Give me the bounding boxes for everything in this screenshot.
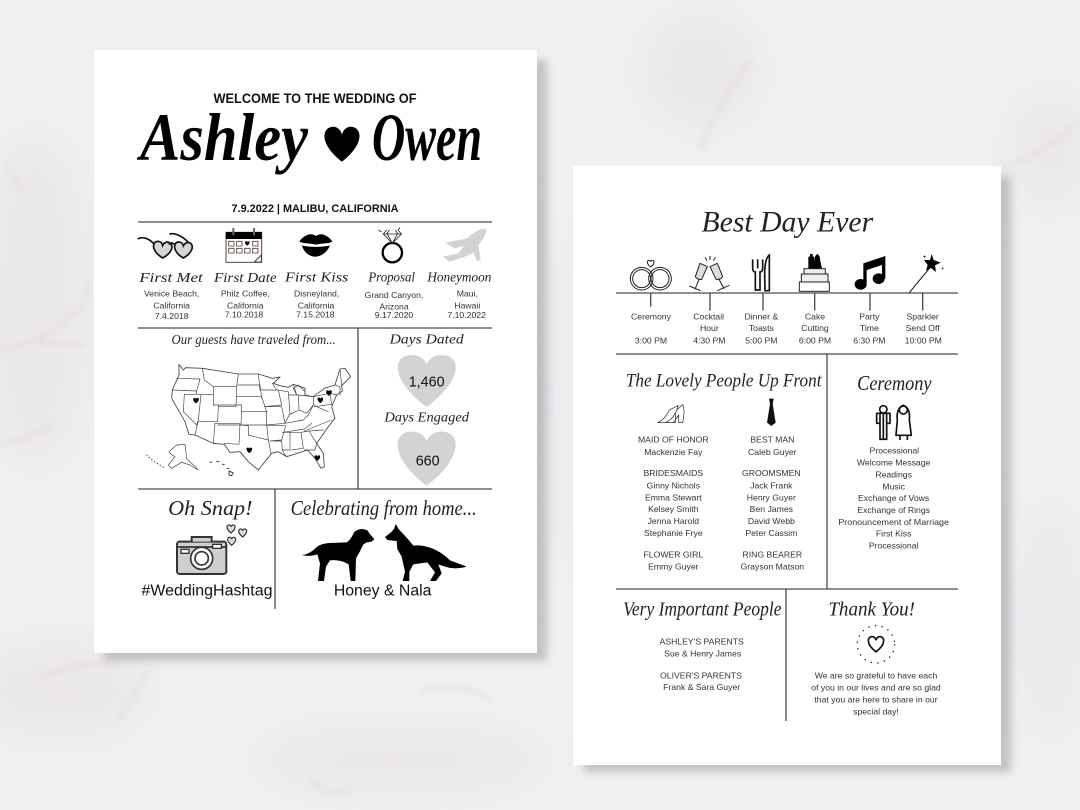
text: first date [213, 270, 277, 320]
text: first date: 7.10.2018 [225, 310, 263, 320]
text: groom party [741, 435, 804, 571]
text: party time: 6:30 PM [853, 335, 885, 345]
text: cocktail hour time [693, 311, 725, 345]
text: send off time [905, 311, 942, 345]
text: ceremony time: Ceremony [631, 311, 672, 321]
text: parents [660, 636, 744, 692]
heading: thank you: Thank You! [828, 599, 915, 621]
text: order of ceremony [838, 446, 949, 550]
text: order of ceremony: Processional [870, 446, 919, 456]
chart: US map [147, 364, 351, 476]
heading: guests traveled: Our guests have traveled from... [171, 333, 336, 348]
text: bridal party: Emmy Guyer [648, 561, 699, 571]
text: groom party: Jack Frank [750, 480, 793, 490]
text: honeymoon: Hawaii [454, 301, 480, 311]
text: order of ceremony: Exchange of Rings [857, 505, 931, 515]
title: couple names [136, 99, 482, 175]
text: ceremony time: 3:00 PM [635, 335, 667, 345]
icon: wedding rings [630, 260, 671, 290]
text: first met [138, 270, 203, 321]
map: Aleutian islands [147, 455, 165, 468]
text: first date: First Date [213, 270, 277, 285]
text: hashtag: #WeddingHashtag [141, 583, 272, 600]
panel: love story timeline [138, 227, 492, 321]
icon: radiant heart [857, 626, 895, 663]
text: honeymoon: Honeymoon [426, 269, 492, 284]
text: thank you message: We are so grateful to have each [815, 670, 937, 680]
text: order of ceremony: Exchange of Vows [858, 493, 930, 503]
text: dinner time: 5:00 PM [745, 335, 777, 345]
text: first met: First Met [138, 270, 203, 285]
icon: high heels [658, 405, 684, 423]
panel: day schedule [630, 207, 944, 345]
text: parents: Sue & Henry James [664, 649, 742, 659]
text: first kiss [284, 269, 348, 320]
icon: lips [299, 234, 332, 257]
text: thank you message: special day! [853, 706, 899, 716]
stat: days engaged: 660 [416, 454, 440, 470]
text: groom party: Peter Cassim [745, 528, 797, 538]
heading: lovely people: The Lovely People Up Front [626, 371, 822, 392]
text: first kiss: First Kiss [284, 269, 348, 284]
text: groom party: Grayson Matson [741, 561, 804, 571]
text: honeymoon [426, 269, 492, 320]
icon: necktie [767, 399, 776, 426]
text: party time: Party [859, 311, 880, 321]
stat: days engaged: Days Engaged [383, 411, 470, 426]
text: proposal [365, 269, 423, 320]
text: groom party: Caleb Guyer [748, 447, 797, 457]
text: groom party: David Webb [748, 516, 795, 526]
text: honeymoon: 7.10.2022 [447, 310, 486, 320]
text: order of ceremony: Processional [869, 540, 919, 550]
icon: heart sunglasses [138, 234, 192, 258]
text: send off time: Sparkler [907, 311, 939, 321]
panel: left card [94, 50, 537, 653]
text: dinner time: Dinner & [744, 311, 778, 321]
text: order of ceremony: Welcome Message [857, 458, 931, 468]
text: first kiss: California [298, 301, 334, 311]
text: cocktail hour time: 4:30 PM [693, 335, 725, 345]
stat: days engaged [383, 411, 470, 486]
text: groom party: BEST MAN [750, 435, 794, 445]
heading: oh snap: Oh Snap! [168, 498, 252, 520]
text: cake time: 6:00 PM [799, 335, 831, 345]
icon: bride and groom [877, 405, 911, 440]
text: send off time: Send Off [906, 323, 940, 333]
map: Hawaii [210, 462, 233, 476]
text: ceremony time [631, 311, 672, 345]
text: bridal party: Kelsey Smith [648, 504, 699, 514]
text: first date: Philz Coffee, [221, 289, 270, 299]
text: cake time: Cutting [801, 323, 829, 333]
text: honeymoon: Maui, [457, 289, 478, 299]
text: thank you message: that you are here to share in our [814, 694, 938, 704]
date and place: 7.9.2022 | MALIBU, CALIFORNIA [232, 203, 399, 215]
text: proposal: Arizona [379, 301, 409, 311]
text: thank you message [811, 670, 941, 716]
stat: days dated [389, 332, 465, 407]
text: cake time: Cake [805, 311, 825, 321]
text: groom party: GROOMSMEN [742, 468, 801, 478]
text: proposal: Proposal [367, 269, 415, 284]
text: dinner time: Toasts [749, 323, 775, 333]
text: first met: 7.4.2018 [155, 311, 189, 321]
text: first met: California [153, 301, 190, 311]
text: bridal party: MAID OF HONOR [638, 435, 709, 445]
text: thank you message: of you in our lives and are so glad [811, 683, 941, 693]
text: order of ceremony: Readings [875, 469, 913, 479]
text: pet names: Honey & Nala [334, 583, 432, 600]
text: first kiss: 7.15.2018 [296, 310, 335, 320]
text: bridal party [638, 435, 709, 571]
panel: lower left sections [141, 332, 477, 600]
text: bridal party: Ginny Nichols [647, 480, 701, 490]
text: first date: California [227, 301, 264, 311]
stat: days dated: Days Dated [389, 332, 465, 347]
title: couple names: Owen [372, 99, 482, 175]
text: bridal party: Stephanie Frye [644, 528, 703, 538]
map marker hearts [193, 390, 332, 461]
text: bridal party: BRIDESMAIDS [644, 468, 703, 478]
title: best day ever: Best Day Ever [701, 207, 874, 239]
text: groom party: Ben James [750, 504, 794, 514]
text: order of ceremony: First Kiss [876, 529, 912, 539]
panel: wedding party and ceremony [626, 371, 949, 571]
card shadows [104, 60, 1011, 772]
text: bridal party: FLOWER GIRL [644, 550, 703, 560]
icon: fork and knife [753, 255, 769, 291]
text: send off time: 10:00 PM [905, 335, 942, 345]
text: cocktail hour time: Hour [700, 323, 719, 333]
text: order of ceremony: Music [882, 481, 906, 491]
text: cocktail hour time: Cocktail [693, 311, 724, 321]
text: bridal party: Mackenzie Fay [644, 447, 703, 457]
title: welcome heading: WELCOME TO THE WEDDING OF [214, 91, 416, 106]
icon: diamond ring [378, 227, 402, 262]
text: party time [853, 311, 885, 345]
icon: camera with hearts [177, 525, 247, 574]
icon: dog silhouettes [302, 524, 467, 581]
map: contiguous states [172, 364, 351, 470]
text: parents: Frank & Sara Guyer [663, 682, 740, 692]
icon: airplane [443, 229, 486, 262]
icon: calendar [226, 228, 262, 262]
text: parents: ASHLEY'S PARENTS [660, 636, 744, 646]
text: bridal party: Emma Stewart [645, 492, 702, 502]
text: dinner time [744, 311, 778, 345]
text: groom party: Henry Guyer [747, 492, 796, 502]
panel: bottom sections [623, 599, 941, 716]
icon: champagne toast [689, 256, 729, 291]
text: party time: Time [860, 323, 879, 333]
text: proposal: Grand Canyon, [365, 290, 423, 300]
heading: ceremony: Ceremony [857, 373, 932, 395]
text: first kiss: Disneyland, [294, 289, 339, 299]
heading: celebrating from home: Celebrating from home... [291, 498, 477, 520]
text: bridal party: Jenna Harold [648, 516, 699, 526]
icon: sparkler [909, 254, 944, 293]
icon: music notes [855, 256, 885, 290]
text: first met: Venice Beach, [144, 289, 199, 299]
text: groom party: RING BEARER [743, 550, 802, 560]
text: proposal: 9.17.2020 [375, 310, 413, 320]
title: couple names: Ashley [136, 99, 309, 175]
panel: right card [573, 166, 1001, 765]
text: parents: OLIVER'S PARENTS [660, 670, 742, 680]
icon: wedding cake [799, 254, 829, 291]
text: order of ceremony: Pronouncement of Marriage [838, 517, 949, 527]
heading: very important people: Very Important People [623, 599, 782, 621]
stat: days dated: 1,460 [409, 375, 445, 391]
map: Alaska [168, 444, 198, 470]
text: cake time [799, 311, 831, 345]
